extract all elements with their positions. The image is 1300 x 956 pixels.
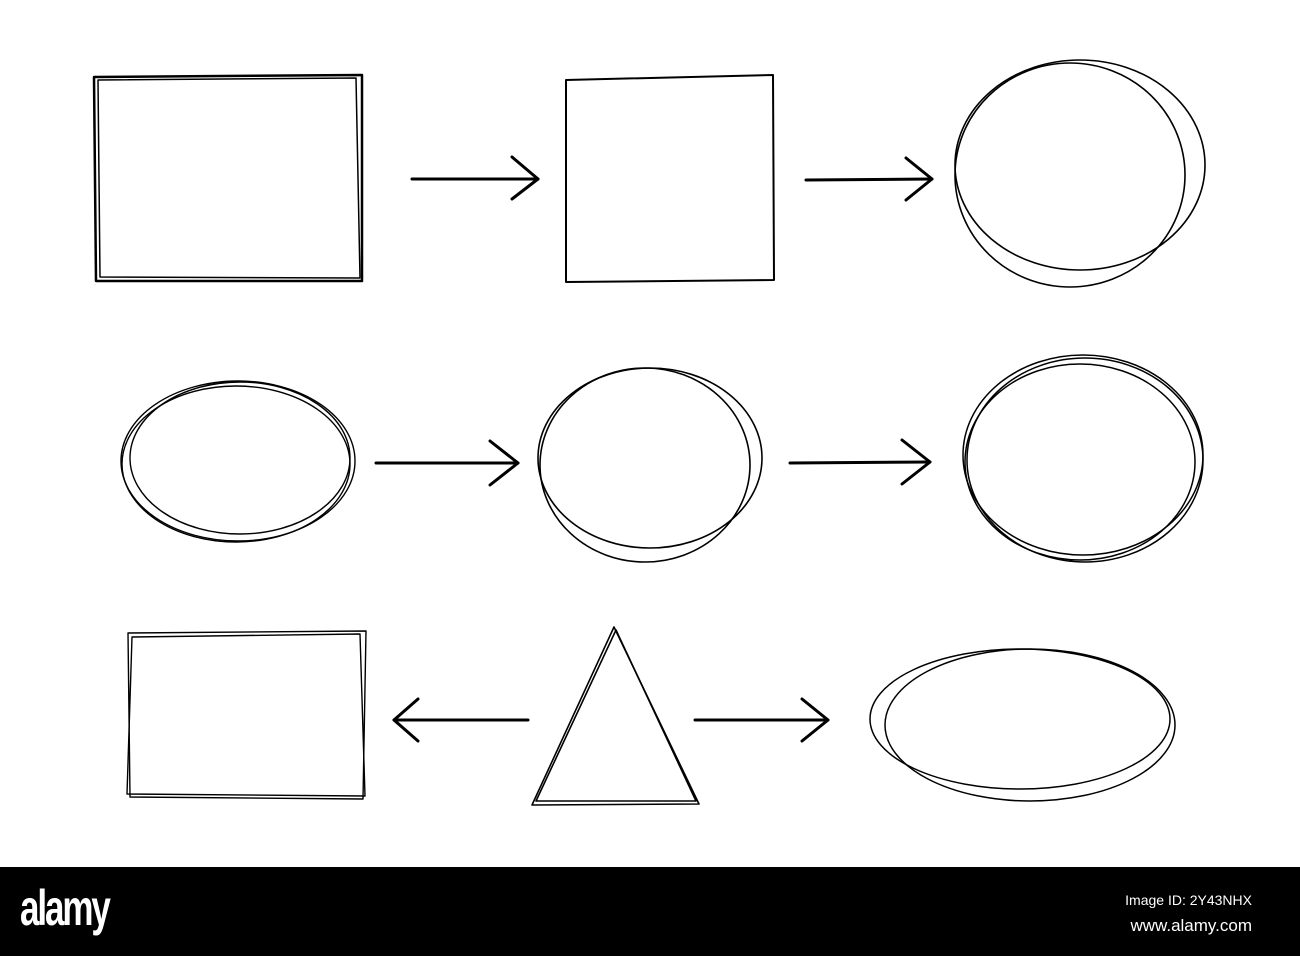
arrow 1 — [412, 157, 538, 199]
shape: triangle — [532, 627, 699, 805]
shape: rectangle 1 — [94, 75, 362, 281]
shape: ellipse 1 — [121, 381, 355, 542]
image id text: www.alamy.com — [1130, 916, 1252, 935]
shape: square — [566, 75, 774, 282]
arrow 6 — [695, 699, 828, 741]
footer bar — [0, 867, 1300, 956]
shape: circle 3 — [963, 355, 1203, 562]
shape: circle 1 — [955, 60, 1205, 287]
row 3 — [127, 627, 1175, 805]
logo: alamy — [20, 880, 109, 936]
image id text: Image ID: 2Y43NHX — [1125, 892, 1252, 908]
shape: ellipse 2 — [870, 649, 1175, 801]
arrow 2 — [806, 158, 932, 200]
arrow 5 — [394, 699, 528, 741]
row 1 — [94, 60, 1205, 287]
row 2 — [121, 355, 1203, 562]
arrow 4 — [790, 440, 930, 484]
shape: circle 2 — [538, 368, 762, 562]
arrow 3 — [376, 441, 518, 485]
image id text — [1125, 892, 1252, 935]
shape: rectangle 2 — [127, 631, 366, 799]
